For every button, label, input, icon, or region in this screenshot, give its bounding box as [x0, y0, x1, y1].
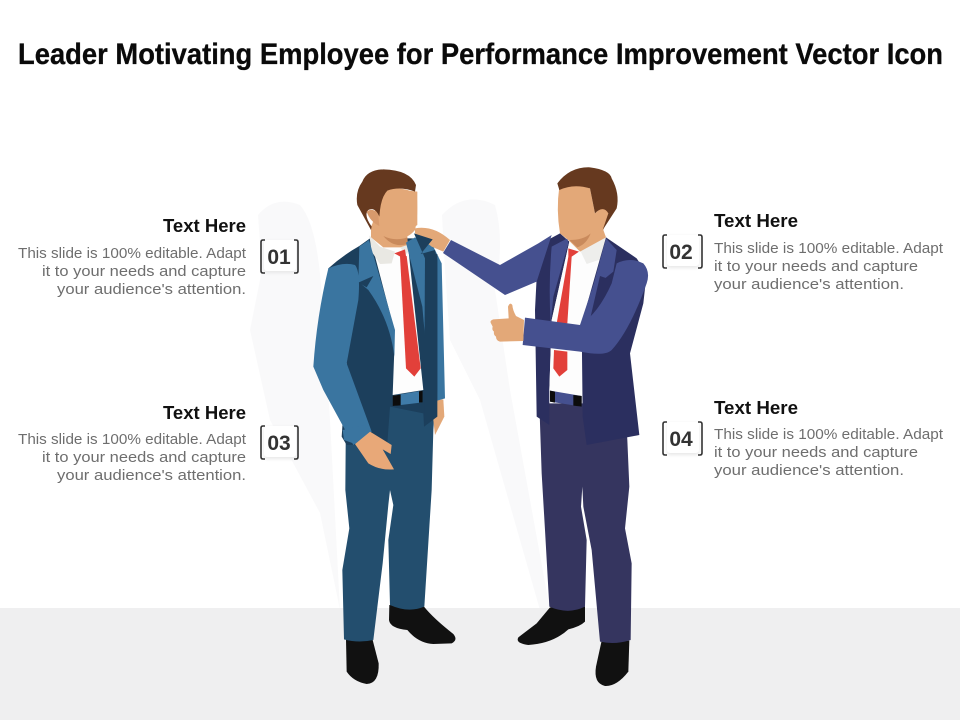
badge 02 — [663, 235, 702, 268]
text block 04: it to your needs and capture — [714, 445, 918, 461]
badge 04: 04 — [669, 428, 693, 451]
figure: employee in blue suit — [313, 169, 455, 684]
badge 01 — [261, 240, 298, 273]
badge 01: 01 — [267, 246, 291, 269]
employee legs and shoes — [342, 405, 455, 684]
badge 04 — [663, 422, 702, 455]
text block 01: your audience's attention. — [57, 282, 246, 298]
leader jacket, shirt, tie, arm and sleeve — [443, 167, 648, 445]
text block 02: Text Here — [714, 211, 798, 231]
employee hand on thigh — [343, 425, 394, 470]
text block 04: your audience's attention. — [714, 463, 904, 479]
floor band — [0, 608, 960, 720]
leader legs and shoes — [518, 403, 632, 686]
badge 03: 03 — [267, 432, 291, 455]
text block 03: This slide is 100% editable. Adapt — [18, 432, 246, 448]
text block 04: This slide is 100% editable. Adapt — [714, 427, 943, 443]
text block 01: This slide is 100% editable. Adapt — [18, 246, 246, 262]
badge 03 — [261, 426, 298, 459]
badge 02: 02 — [669, 241, 693, 264]
text block 03: it to your needs and capture — [42, 450, 246, 466]
figure shadows on wall — [250, 199, 550, 610]
text block 03: your audience's attention. — [57, 468, 246, 484]
employee jacket, shirt, tie and sleeve — [313, 188, 450, 445]
text block 01: it to your needs and capture — [42, 264, 246, 280]
text block 03 — [18, 403, 246, 484]
text block 02: This slide is 100% editable. Adapt — [714, 241, 943, 257]
text block 02 — [714, 211, 943, 293]
text block 01: Text Here — [163, 216, 246, 236]
employee head and hair — [357, 169, 417, 239]
text block 04 — [714, 398, 943, 479]
figure: leader in navy suit — [443, 167, 648, 686]
text block 01 — [18, 216, 246, 298]
text block 02: your audience's attention. — [714, 277, 904, 293]
text block 02: it to your needs and capture — [714, 259, 918, 275]
text block 04: Text Here — [714, 398, 798, 418]
text block 03: Text Here — [163, 403, 246, 423]
